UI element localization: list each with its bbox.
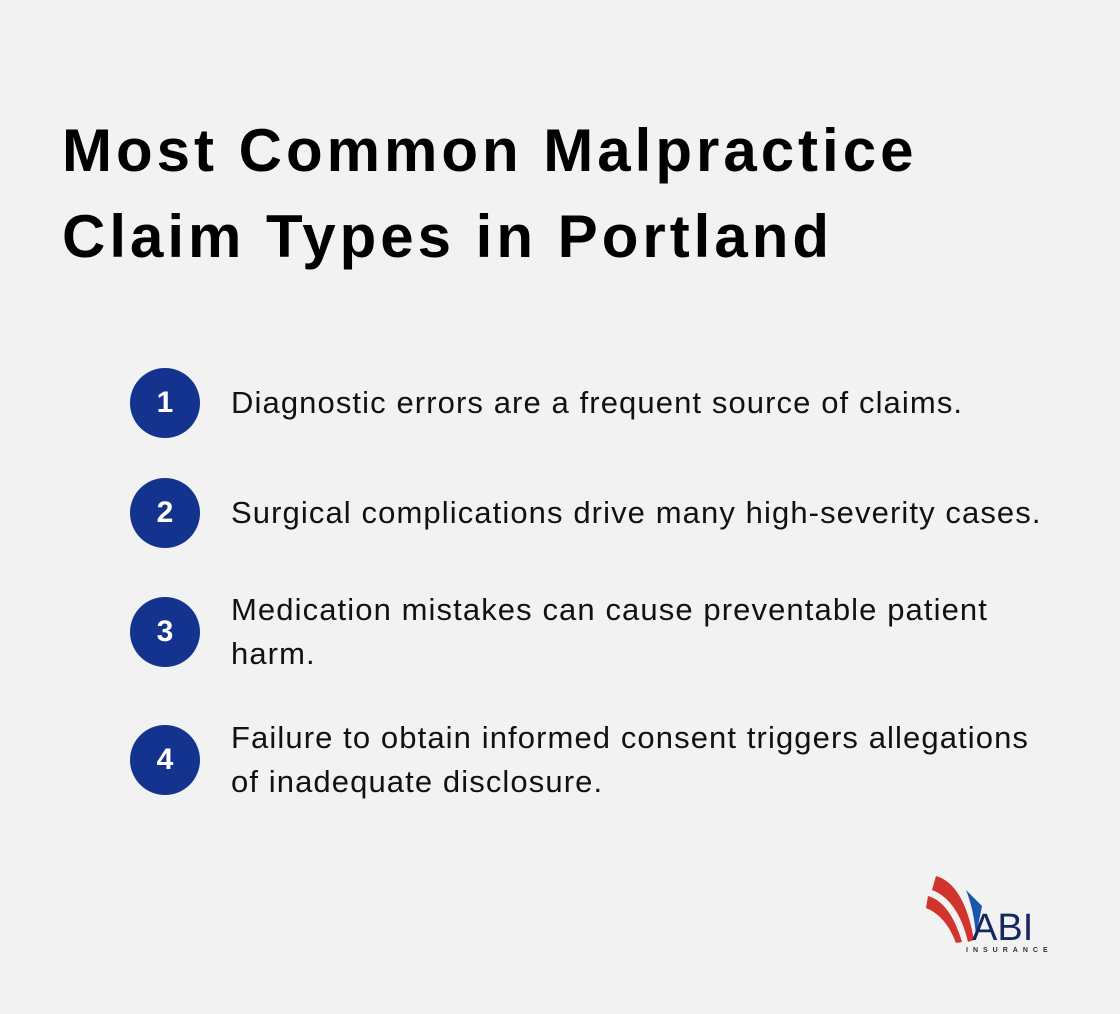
text 3: Medication mistakes can cause preventable patient xyxy=(231,592,988,627)
text 4: Failure to obtain informed consent triggers allegations xyxy=(231,720,1029,755)
title xyxy=(62,117,917,270)
item 1 xyxy=(130,368,963,438)
item 2 xyxy=(130,478,1042,548)
title: Claim Types in Portland xyxy=(62,203,833,270)
text 4 xyxy=(231,720,1029,799)
badge 1 xyxy=(130,368,200,438)
badge 4 xyxy=(130,725,200,795)
text 3: harm. xyxy=(231,636,316,671)
item 3 xyxy=(130,592,988,671)
logo xyxy=(926,876,1053,954)
logo: ABI xyxy=(972,907,1033,949)
badge 2: 2 xyxy=(157,496,173,529)
text 3 xyxy=(231,592,988,671)
badge 4: 4 xyxy=(157,743,173,776)
badge 3: 3 xyxy=(157,615,173,648)
badge 1: 1 xyxy=(157,386,173,419)
item 4 xyxy=(130,720,1029,799)
text 4: of inadequate disclosure. xyxy=(231,764,603,799)
logo: INSURANCE xyxy=(966,947,1053,954)
badge 2 xyxy=(130,478,200,548)
text 1: Diagnostic errors are a frequent source of claims. xyxy=(231,385,963,420)
title: Most Common Malpractice xyxy=(62,117,917,184)
badge 3 xyxy=(130,597,200,667)
text 2: Surgical complications drive many high-severity cases. xyxy=(231,495,1042,530)
